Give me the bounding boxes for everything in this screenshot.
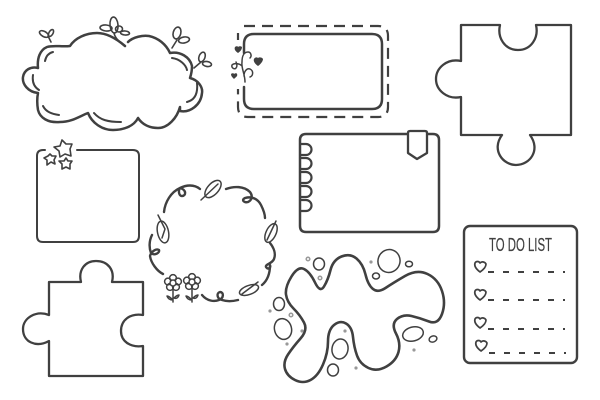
puzzle piece bottom left — [23, 261, 143, 376]
flowers — [165, 274, 200, 302]
blob bubbles — [272, 246, 438, 376]
puzzle piece top right — [436, 25, 571, 165]
cloud outline — [23, 33, 202, 130]
blob outline — [284, 255, 444, 382]
cloud frame — [23, 17, 212, 130]
tag dashed border — [238, 26, 388, 117]
dashed tag frame — [231, 26, 388, 117]
leaf and flower wreath — [150, 178, 280, 302]
card title: TO DO LIST — [489, 235, 552, 255]
star frame border — [37, 150, 139, 242]
three stars — [44, 140, 72, 169]
cloud inner highlights — [33, 52, 197, 122]
tag solid border — [244, 34, 382, 109]
to do list card — [464, 226, 577, 363]
list hearts — [475, 262, 487, 351]
list dashed lines — [488, 272, 566, 353]
star note frame — [37, 140, 139, 242]
sprouts on cloud — [38, 17, 212, 68]
spiral rings — [300, 144, 312, 211]
organic blob frame — [268, 246, 444, 382]
blob dots — [268, 260, 416, 370]
bookmark — [408, 131, 427, 159]
wreath curls — [150, 186, 275, 301]
notebook border — [300, 134, 439, 232]
tag swirl and hearts — [231, 46, 263, 82]
tag dashed corner — [237, 33, 239, 40]
wreath leaves — [155, 178, 280, 298]
notebook frame — [300, 131, 439, 232]
card border — [464, 226, 577, 363]
